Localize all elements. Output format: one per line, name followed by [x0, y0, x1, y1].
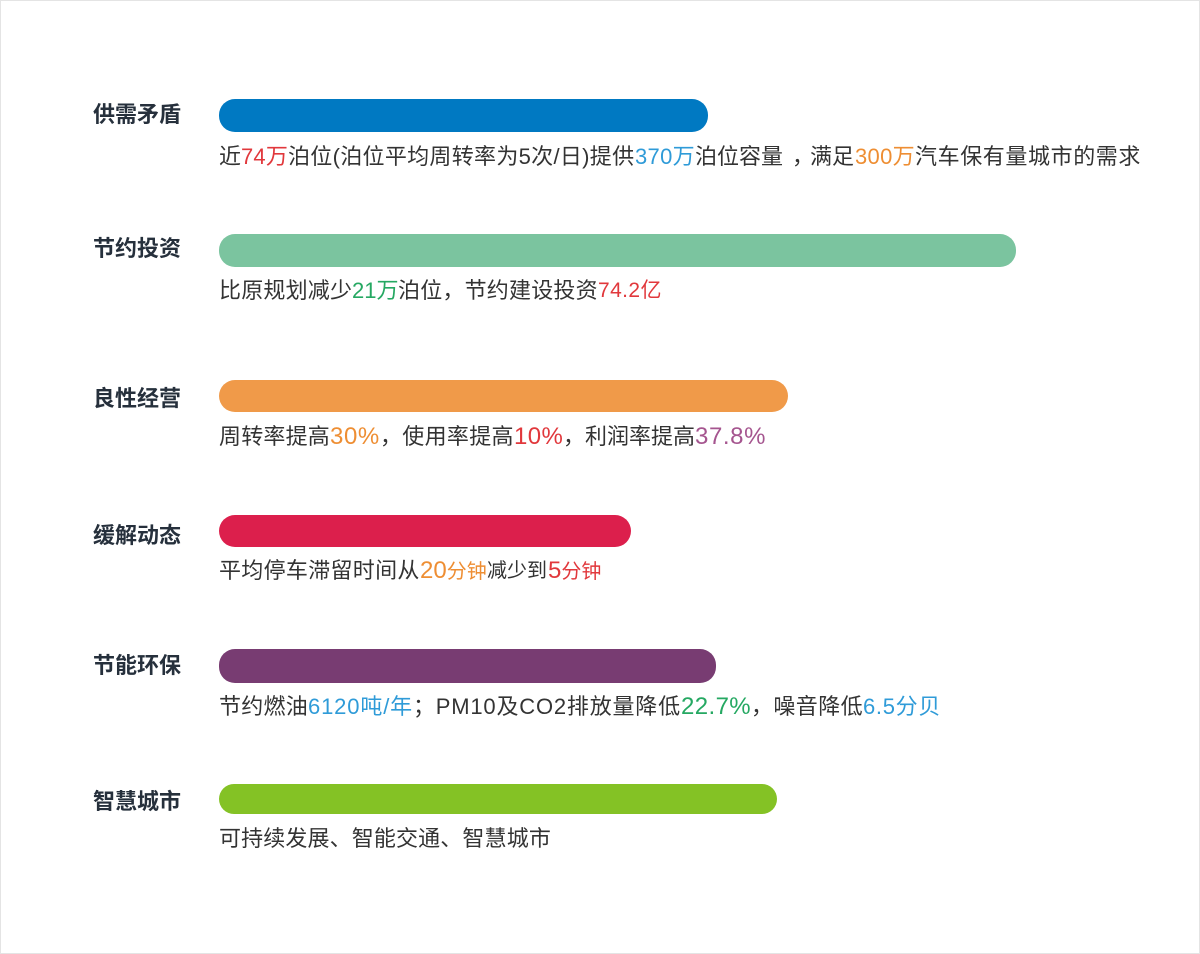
row: 智慧城市	[93, 784, 777, 851]
text: 节约投资 description: 21万	[352, 278, 398, 303]
text: 供需矛盾 description: 泊位(泊位平均周转率为5次/日)提供	[288, 144, 634, 169]
row: 节约投资	[93, 234, 1016, 303]
row: 良性经营	[93, 380, 788, 450]
text: 供需矛盾 description: 泊位容量	[695, 144, 783, 169]
text: 节能环保 description	[219, 693, 941, 720]
text: 良性经营 description: ，使用率提高	[380, 424, 514, 449]
row: 缓解动态	[93, 515, 631, 584]
text: 节能环保 description: 6120吨/年	[308, 694, 413, 719]
text: 良性经营 description: 30%	[330, 423, 380, 450]
text: 缓解动态 description: 减少到	[487, 560, 547, 582]
text: 良性经营 description	[219, 423, 766, 450]
text: 供需矛盾 description: 300万	[855, 144, 915, 169]
text: 良性经营 description: 37.8%	[695, 423, 766, 450]
heading: 节能环保: 节能环保	[93, 653, 181, 678]
row: 供需矛盾	[93, 99, 1141, 169]
text: 节能环保 description: 节约燃油	[219, 694, 308, 719]
text: 供需矛盾 description: 近	[219, 144, 241, 169]
text: 供需矛盾 description: 汽车保有量城市的需求	[915, 144, 1141, 169]
text: 节能环保 description: 6.5分贝	[863, 694, 941, 719]
bar: 缓解动态	[219, 515, 631, 547]
text: 良性经营 description: 周转率提高	[219, 424, 330, 449]
heading: 缓解动态: 缓解动态	[93, 523, 181, 548]
text: 节能环保 description: 22.7%	[681, 693, 751, 720]
text: 智慧城市 description: 可持续发展、智能交通、智慧城市	[219, 826, 551, 851]
bar: 节约投资	[219, 234, 1016, 267]
text: 节约投资 description: 泊位，节约建设投资	[398, 278, 598, 303]
text: 供需矛盾 description: 370万	[635, 144, 695, 169]
text: 缓解动态 description: 5分钟	[548, 557, 601, 584]
text: 缓解动态 description	[219, 557, 601, 584]
text: 缓解动态 description: 平均停车滞留时间从	[219, 558, 420, 583]
heading: 供需矛盾: 供需矛盾	[93, 102, 181, 127]
text: 节约投资 description: 74.2亿	[598, 279, 662, 302]
heading: 良性经营: 良性经营	[93, 386, 181, 411]
bar: 供需矛盾	[219, 99, 708, 132]
text: 供需矛盾 description	[219, 144, 1141, 169]
bar: 智慧城市	[219, 784, 777, 814]
text: 缓解动态 description: 20分钟	[420, 557, 487, 584]
text: 节能环保 description: ，噪音降低	[751, 694, 863, 719]
text: 节约投资 description: 比原规划减少	[219, 278, 352, 303]
text: 节约投资 description	[219, 278, 662, 303]
text: 供需矛盾 description: ，	[792, 144, 814, 169]
text: 良性经营 description: 10%	[514, 423, 563, 450]
bar: 良性经营	[219, 380, 788, 412]
heading: 节约投资: 节约投资	[93, 236, 181, 261]
text: 节能环保 description: ；PM10及CO2排放量降低	[413, 694, 681, 719]
heading: 智慧城市: 智慧城市	[93, 789, 181, 814]
bar: 节能环保	[219, 649, 716, 683]
text: 供需矛盾 description: 满足	[810, 144, 854, 169]
text: 良性经营 description: ，利润率提高	[563, 424, 695, 449]
text: 供需矛盾 description: 74万	[241, 144, 288, 169]
row: 节能环保	[93, 649, 941, 720]
